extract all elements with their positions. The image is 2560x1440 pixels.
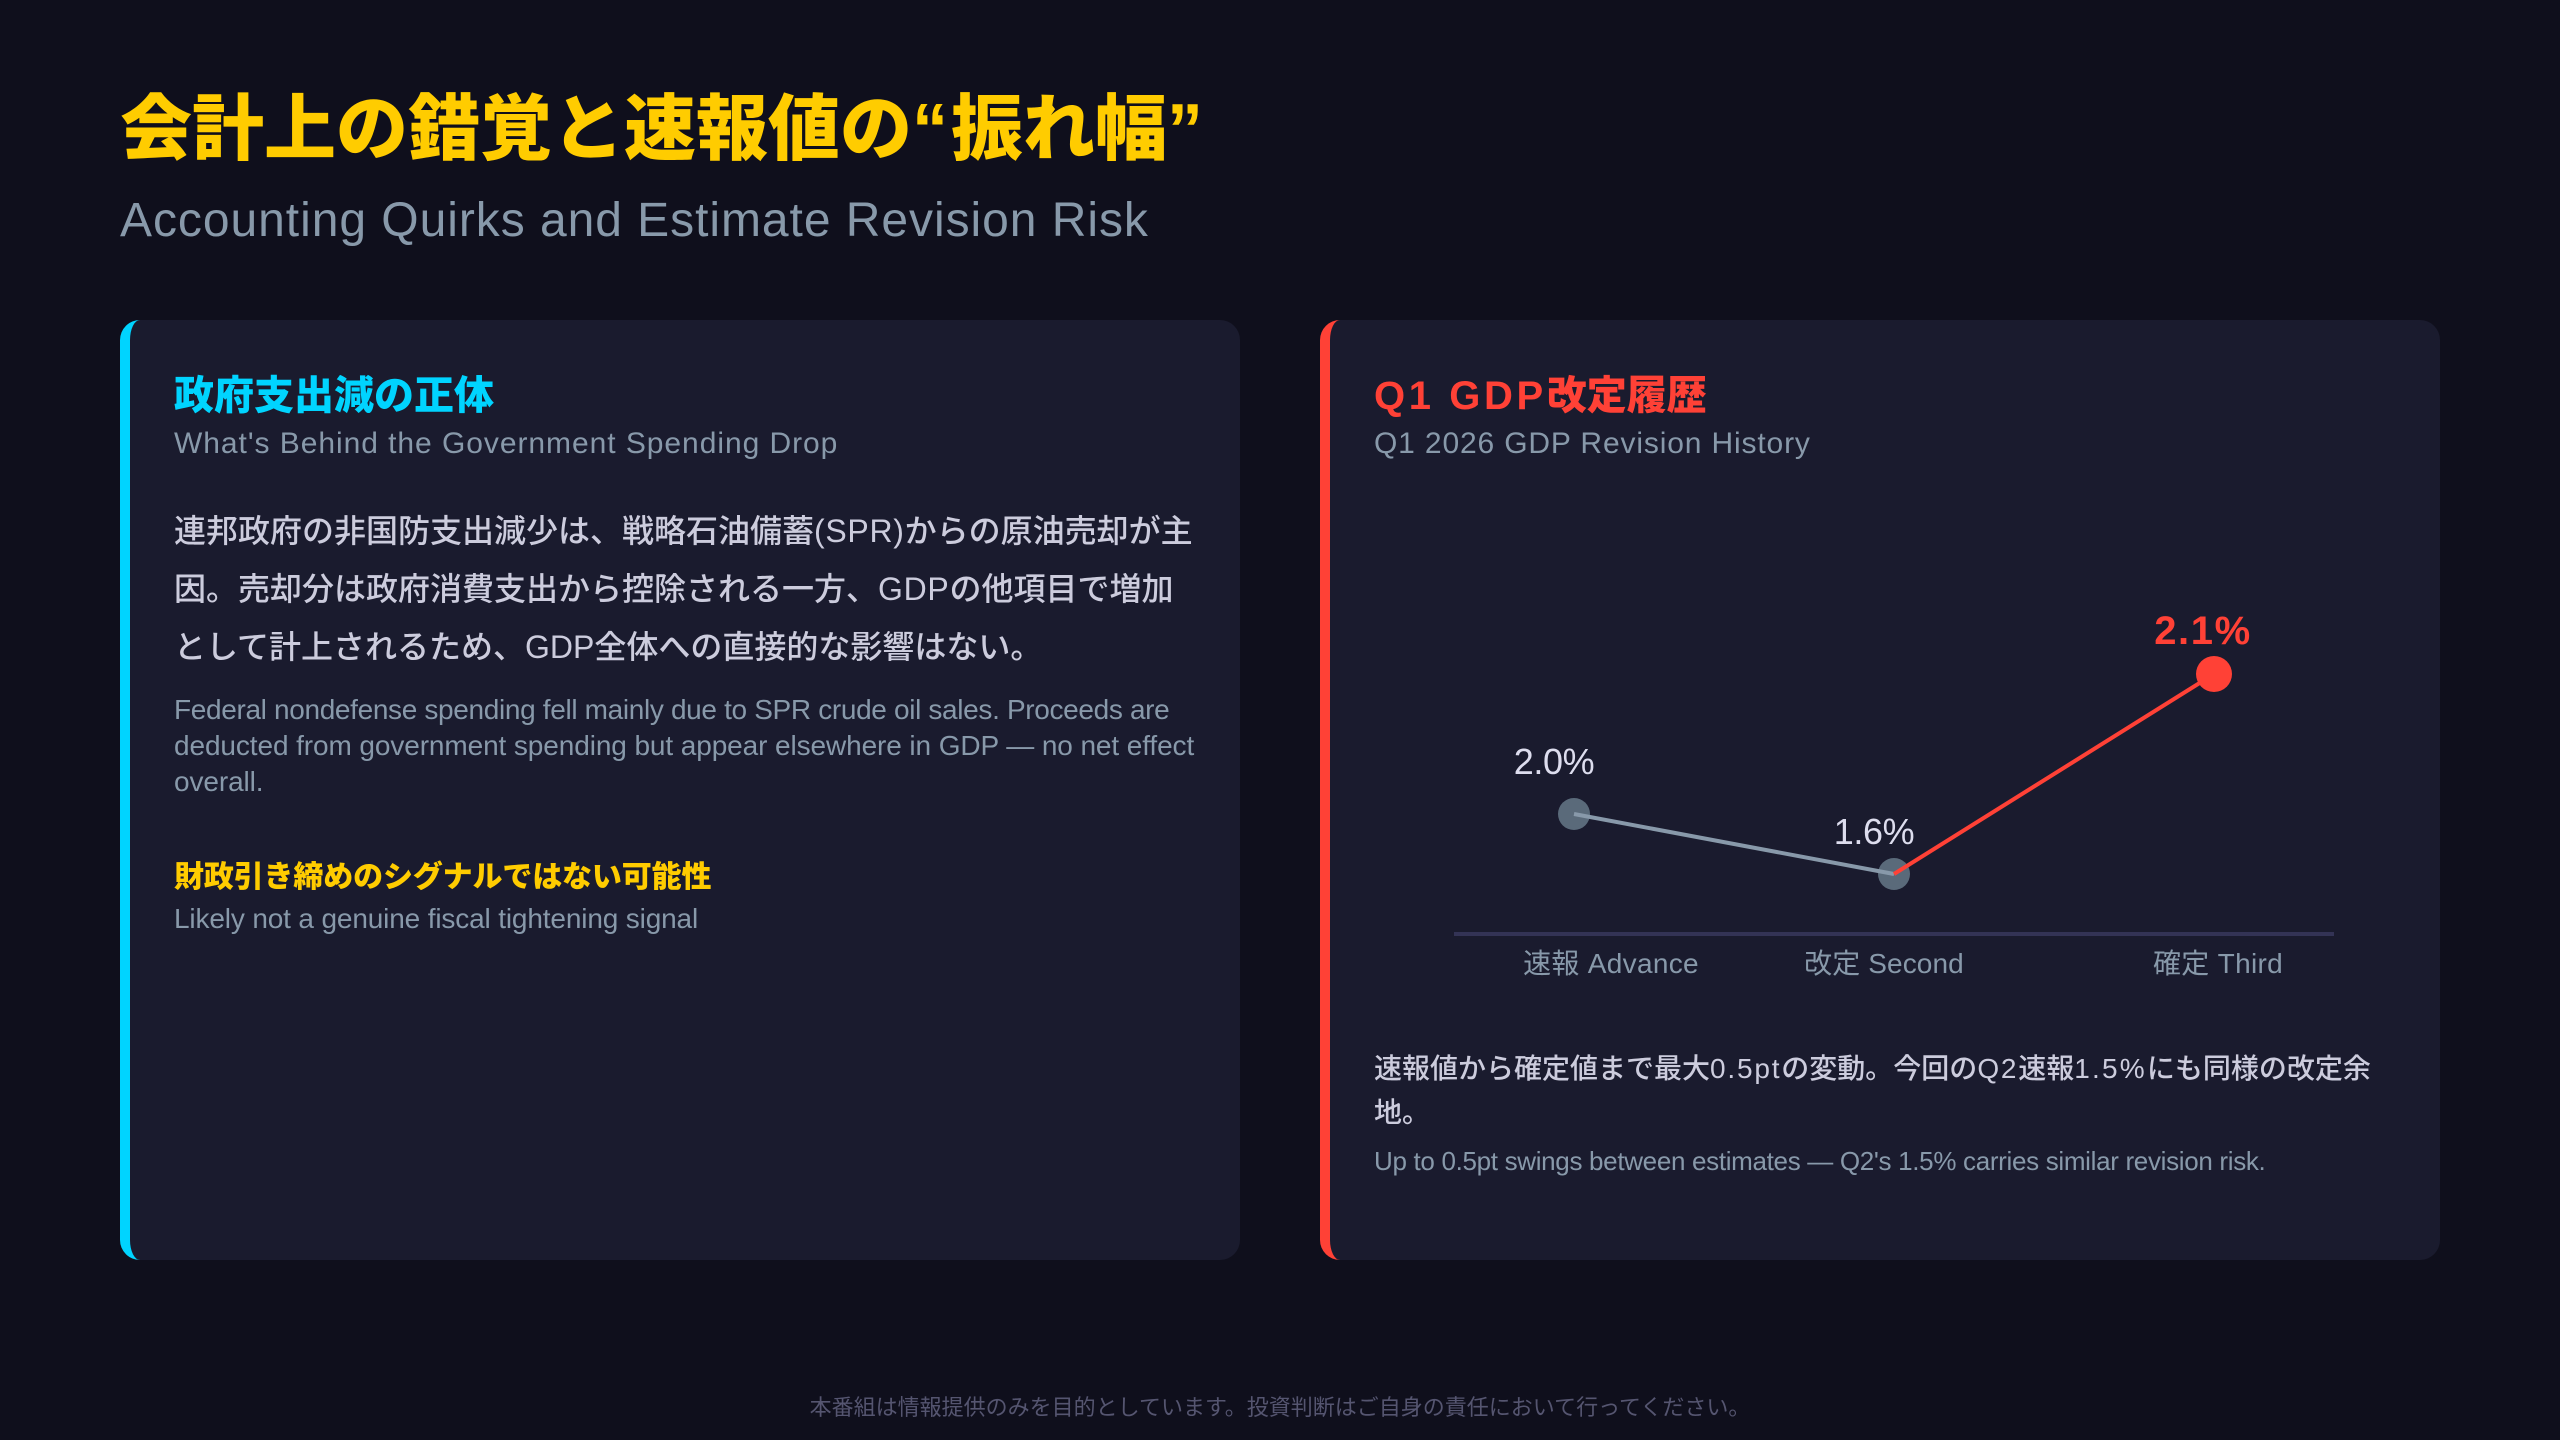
chart takeaway: Japanese [1374, 1053, 2371, 1128]
body text: Japanese explanation [174, 513, 1193, 665]
body text: English explanation: overall. [174, 766, 263, 797]
footer disclaimer: 本番組は情報提供のみを目的としています。投資判断はご自身の責任において行ってください。 [810, 1395, 1750, 1420]
body text: Japanese explanation: として計上されるため、GDP全体への直接的な影響はない。 [174, 629, 1042, 665]
body text: Japanese explanation: 連邦政府の非国防支出減少は、戦略石油備蓄(SPR)からの原油売却が主 [174, 513, 1193, 549]
body text: English explanation: deducted from government spending but appear elsewhere in GDP — no net effect [174, 730, 1194, 761]
chart takeaway: Japanese: 速報値から確定値まで最大0.5ptの変動。今回のQ2速報1.5%にも同様の改定余 [1374, 1053, 2371, 1084]
line chart: GDP revisions: 確定 Third [2153, 948, 2283, 979]
body text: Japanese explanation: 因。売却分は政府消費支出から控除される一方、GDPの他項目で増加 [174, 571, 1173, 607]
line chart: GDP revisions [1454, 609, 2334, 979]
panel subheading: government spending: What's Behind the Government Spending Drop [174, 427, 838, 460]
callout subheading: not fiscal tightening: Likely not a genuine fiscal tightening signal [174, 903, 698, 934]
panel heading: GDP revision history: Q1 GDP改定履歴 [1374, 374, 1707, 418]
chart takeaway: English: Up to 0.5pt swings between estimates — Q2's 1.5% carries similar revision risk. [1374, 1146, 2265, 1176]
line chart: GDP revisions: 速報 Advance [1523, 948, 1699, 979]
line chart: GDP revisions: 2.1% [2154, 609, 2252, 653]
panel heading: government spending: 政府支出減の正体 [174, 374, 494, 418]
body text: English explanation: Federal nondefense spending fell mainly due to SPR crude oil sales. Proceeds are [174, 694, 1169, 725]
callout heading: not fiscal tightening: 財政引き締めのシグナルではない可能性 [174, 861, 711, 894]
line chart: GDP revisions: 改定 Second [1804, 948, 1964, 979]
line chart: GDP revisions: 2.0% [1514, 741, 1594, 782]
panel subheading: GDP revision history: Q1 2026 GDP Revision History [1374, 427, 1811, 460]
subtitle: Accounting Quirks and Estimate Revision Risk [120, 194, 1149, 247]
body text: English explanation [174, 694, 1194, 797]
line chart: GDP revisions: 1.6% [1834, 811, 1914, 852]
panel: government spending [120, 320, 1240, 1260]
panel: GDP revision history [1320, 320, 2440, 1260]
chart takeaway: Japanese: 地。 [1374, 1097, 1430, 1128]
title: 会計上の錯覚と速報値の“振れ幅” [120, 90, 1203, 170]
